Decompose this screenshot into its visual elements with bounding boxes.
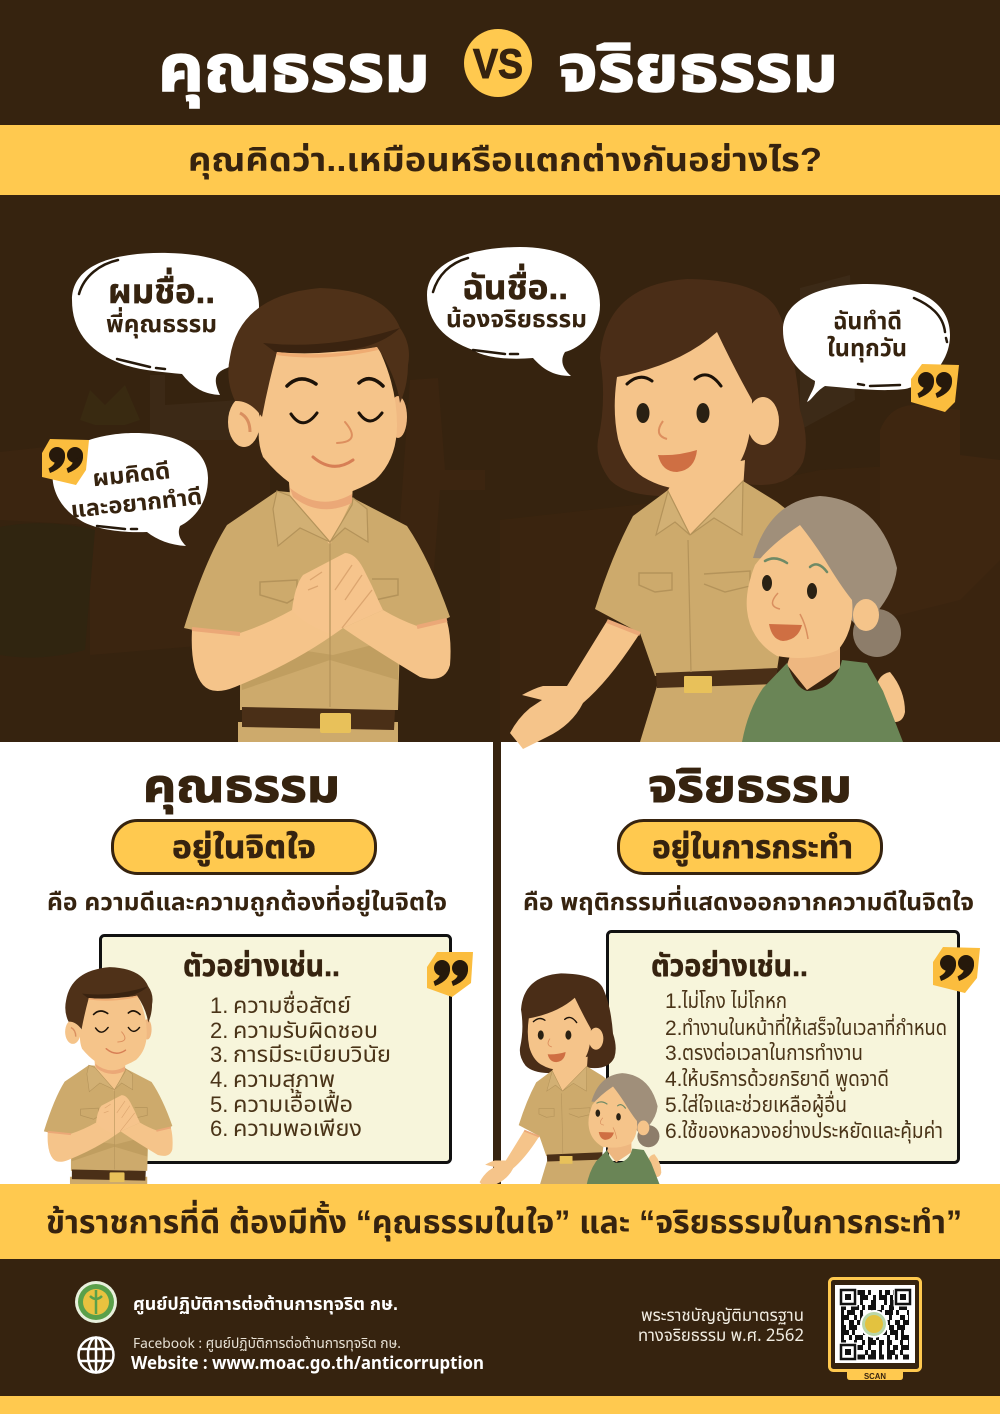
figure: woman officer with elderly lady [510,279,905,749]
pockets [260,579,398,603]
icon: quote tag [911,364,959,412]
scan tab: SCAN [864,1372,886,1381]
mouth [658,450,697,472]
subtitle band: คุณคิดว่า..เหมือนหรือแตกต่างกันอย่างไร? [188,141,822,180]
elder nose, mouth, wrinkle [772,593,808,639]
example box [100,936,450,1162]
example box: ตัวอย่างเช่น.. [651,950,808,983]
hands [292,553,383,635]
example box: ความพอเพียง [233,1116,362,1141]
speech bubble: ผมชื่อ พี่คุณธรรม: ผมชื่อ.. [108,267,215,311]
pill: อยู่ในจิตใจ: อยู่ในจิตใจ [172,829,316,866]
example box: ไม่โกง ไม่โกหก [681,989,787,1013]
brows and eyes [627,375,721,386]
speech bubble: ฉันทำดี ในทุกวัน: ในทุกวัน [827,335,907,363]
speech bubble: ผมชื่อ พี่คุณธรรม [72,253,259,395]
facebook line: Facebook : ศูนย์ปฏิบัติการต่อต้านการทุจริต กษ. [133,1334,401,1353]
hand tip over the white edge [516,740,539,749]
nose [659,421,667,439]
icon: agency logo [75,1281,117,1323]
icon: quote tag [42,439,89,485]
small figure: man [44,967,173,1186]
ears [228,397,260,447]
bottom yellow strip [0,1396,1000,1414]
elder shirt [742,660,903,742]
woman hand on shoulder [877,672,905,722]
elder face [747,525,852,658]
pill: อยู่ในการกระทำ [618,820,882,874]
background: faded office furniture [0,275,1000,742]
speech bubble: ฉันทำดี ในทุกวัน: ฉันทำดี [833,308,902,335]
figure: man with hands on heart [184,288,451,742]
heading: คุณธรรม [143,760,340,814]
definition: คือ ความดีและความถูกต้องที่อยู่ในจิตใจ [47,885,447,917]
conclusion band: ข้าราชการที่ดี ต้องมีทั้ง “คุณธรรมในใจ” และ “จริยธรรมในการกระทำ” [46,1199,962,1241]
example box: 6. [665,1120,683,1143]
speech bubble: ผมชื่อ พี่คุณธรรม: พี่คุณธรรม [106,307,217,339]
neck [668,460,745,535]
woman hair back [598,279,806,496]
speech bubble: ผมคิดดี และอยากทำดี: และอยากทำดี [69,483,203,523]
example box: ใช้ของหลวงอย่างประหยัดและคุ้มค่า [682,1119,943,1144]
example box: 6. [210,1116,228,1141]
example box: 5. [665,1094,683,1117]
speech bubble: ฉันชื่อ น้องจริยธรรม [427,247,600,376]
arm and hand [510,621,640,749]
top title band [158,29,838,108]
example box: 3. [210,1042,228,1067]
example box: ความเอื้อเฟื้อ [233,1089,353,1117]
example box: 4. [665,1068,683,1091]
example box: ความรับผิดชอบ [233,1018,378,1043]
example box: ทำงานในหน้าที่ให้เสร็จในเวลาที่กำหนด [682,1013,947,1040]
elder brows and eyes [765,558,827,572]
ear [747,397,779,445]
example box: 2. [665,1017,683,1040]
title: จริยธรรม: จริยธรรม [558,31,838,105]
collar [273,491,368,546]
speech bubble: ผมคิดดี และอยากทำดี: ผมคิดดี [91,457,171,491]
neck [288,470,354,545]
website line: Website : www.moac.go.th/anticorruption [131,1351,484,1375]
example box: 1. [210,993,228,1018]
panel: จริยธรรม [480,760,980,1190]
agency name: ศูนย์ปฏิบัติการต่อต้านการทุจริต กษ. [133,1294,398,1315]
center divider [493,742,501,1184]
elder hair [753,496,897,630]
subtitle band [0,125,1000,195]
QR code [830,1278,920,1370]
elder ear [853,599,879,631]
speech bubble: ผมคิดดี และอยากทำดี [42,433,208,546]
act reference: พระราชบัญญัติมาตรฐาน [641,1303,804,1326]
speech bubble: ฉันชื่อ น้องจริยธรรม: น้องจริยธรรม [446,305,587,333]
example box: 3. [665,1042,683,1065]
definition: คือ พฤติกรรมที่แสดงออกจากความดีในจิตใจ [523,885,974,916]
hair [228,288,409,417]
shirt [184,491,450,710]
small figure: woman and elder [480,973,661,1190]
speech bubble: ฉันทำดี ในทุกวัน [783,284,959,412]
collar [656,481,743,535]
scan tab [847,1371,903,1381]
example box [608,932,958,1162]
example box: 2. [210,1018,228,1043]
pill: อยู่ในการกระทำ: อยู่ในการกระทำ [652,829,853,866]
example box: ความสุภาพ [233,1067,335,1093]
arms [192,610,333,691]
title: คุณธรรม: คุณธรรม [158,31,430,108]
pants [238,722,398,742]
panel: คุณธรรม [44,760,473,1186]
nose and mouth [337,422,352,443]
pockets [639,571,750,592]
badge: VS: VS [473,40,523,87]
pants [640,680,777,742]
example box: ความซื่อสัตย์ [233,990,351,1018]
speech bubble: ฉันชื่อ น้องจริยธรรม: ฉันชื่อ.. [462,263,568,307]
conclusion band [0,1184,1000,1259]
example box: 4. [210,1067,228,1092]
icon: globe [78,1337,114,1373]
example box: การมีระเบียบวินัย [233,1042,391,1067]
icon: quote tag [427,952,473,997]
elder neck [787,640,840,690]
eyebrows and eyes [287,379,383,386]
example box: 5. [210,1092,228,1117]
face [615,332,752,489]
icon: quote tag [933,947,980,993]
footer [75,1278,920,1381]
act reference: ทางจริยธรรม พ.ศ. 2562 [638,1323,804,1346]
belt [242,707,395,733]
example box: ให้บริการด้วยกริยาดี พูดจาดี [682,1067,889,1092]
heading: จริยธรรม [648,760,852,812]
face [259,345,397,497]
badge: VS [464,29,532,97]
belt [656,668,777,693]
elder bun [853,609,901,657]
white content area [0,742,1000,1184]
example box: ตรงต่อเวลาในการทำงาน [682,1041,863,1065]
example box: ใส่ใจและช่วยเหลือผู้อื่น [682,1090,847,1118]
shirt [595,481,800,676]
pill: อยู่ในจิตใจ [112,820,376,874]
act reference [638,1303,804,1346]
example box: ตัวอย่างเช่น.. [183,950,340,983]
example box: 1. [665,990,683,1013]
